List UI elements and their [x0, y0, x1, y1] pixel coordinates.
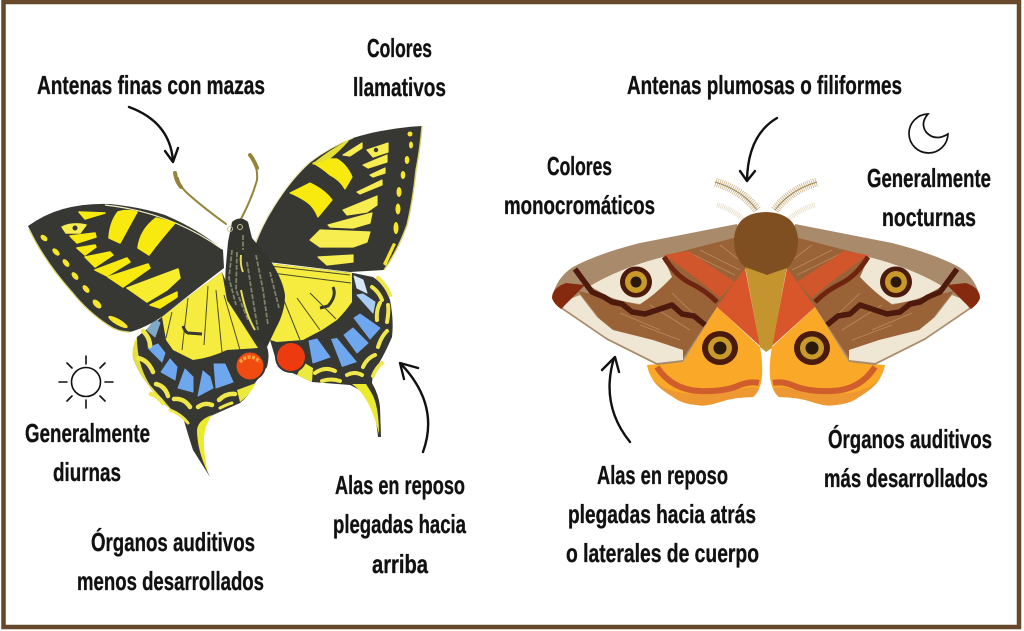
butterfly illustration [28, 126, 422, 477]
right forewing yellow bands [290, 141, 352, 217]
label: colores monocromáticos: monocromáticos [504, 190, 655, 220]
label: alas plegadas hacia arriba [333, 470, 466, 579]
icon: moon [909, 114, 948, 153]
moth cream band [563, 295, 683, 363]
label: alas plegadas hacia arriba: arriba [372, 549, 428, 579]
label: generalmente diurnas: diurnas [53, 457, 121, 487]
butterfly antennae [175, 155, 257, 224]
label: generalmente diurnas: Generalmente [25, 418, 150, 448]
moth hindwing [647, 307, 762, 406]
moth antennae [715, 182, 817, 219]
label: alas plegadas hacia atrás [566, 460, 759, 568]
left hindwing [132, 272, 268, 477]
label: órganos menos desarrollados: Órganos auditivos [91, 527, 255, 557]
label: generalmente diurnas [25, 418, 150, 487]
right hindwing red spot [275, 341, 307, 373]
moth forewing eyespot [620, 266, 652, 298]
left forewing yellow bands [62, 210, 180, 308]
label: alas plegadas hacia arriba: Alas en reposo [335, 470, 465, 500]
left forewing [28, 204, 224, 332]
left hindwing yellow crescents [138, 331, 235, 423]
arrow: moth wings [602, 357, 630, 442]
label: órganos menos desarrollados: menos desarrollados [77, 566, 264, 596]
label: colores llamativos: Colores [367, 33, 432, 63]
label: colores monocromáticos: Colores [547, 151, 612, 181]
label: antenas finas: Antenas finas con mazas [37, 70, 265, 100]
arrow: butterfly antennae [129, 107, 178, 162]
arrow: butterfly wings [400, 363, 428, 452]
right forewing yellow bars [310, 143, 388, 265]
moth red band [664, 251, 735, 298]
arrow: moth antennae [740, 118, 777, 181]
moth hindwing eyespot [702, 331, 738, 365]
right hindwing yellow crescents [315, 278, 390, 381]
butterfly body [225, 218, 285, 347]
label: generalmente nocturnas [867, 163, 991, 232]
moth right wings [770, 224, 980, 406]
label: antenas plumosas: Antenas plumosas o filiformes [627, 70, 902, 100]
moth illustration [552, 182, 980, 406]
label: colores llamativos [353, 33, 446, 102]
moth forewing [552, 224, 747, 365]
label: alas plegadas hacia arriba: plegadas hacia [333, 509, 466, 539]
right hindwing [268, 263, 393, 437]
label: colores llamativos: llamativos [353, 72, 446, 102]
moth thorax [734, 212, 798, 275]
moth shoulder triangle [717, 268, 760, 346]
left hindwing red spot [234, 349, 266, 381]
label: alas plegadas hacia atrás: Alas en reposo [597, 460, 728, 490]
right forewing [253, 126, 422, 272]
label: órganos menos desarrollados [77, 527, 264, 596]
moth cream patch [590, 257, 672, 304]
left hindwing blue patches [147, 319, 233, 396]
moth left wings [552, 224, 762, 406]
label: generalmente nocturnas: nocturnas [882, 202, 976, 232]
icon: sun [59, 356, 113, 408]
left forewing margin dots [39, 234, 129, 330]
moth forewing veins [620, 245, 742, 340]
moth abdomen [745, 266, 787, 352]
right hindwing blue patches [309, 276, 380, 367]
moth wing tip [552, 283, 585, 309]
label: alas plegadas hacia atrás: o laterales de cuerpo [566, 538, 759, 568]
moth wavy line [575, 269, 705, 325]
label: colores monocromáticos [504, 151, 655, 220]
label: alas plegadas hacia atrás: plegadas hacia atrás [568, 499, 756, 529]
label: órganos más desarrollados [824, 424, 992, 493]
right forewing margin dots [383, 132, 413, 266]
